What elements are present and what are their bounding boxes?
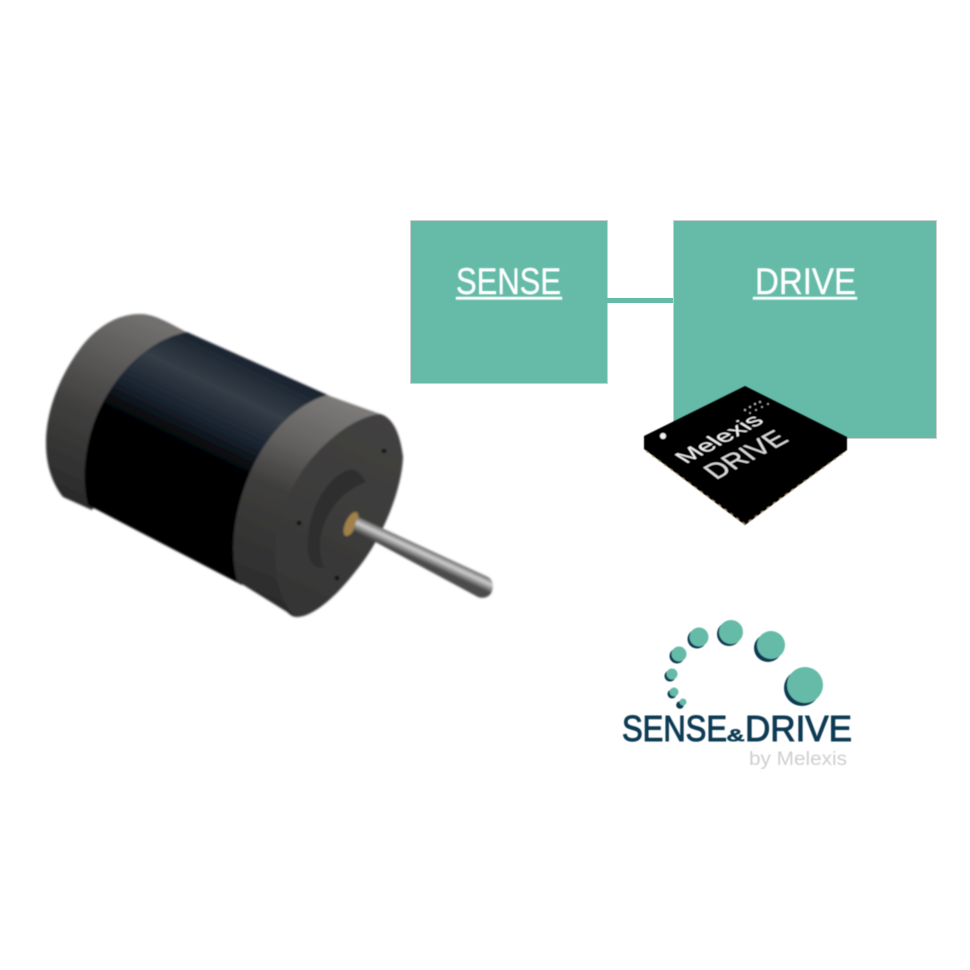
motor front band [233, 395, 403, 617]
heading: drive: DRIVE [755, 261, 856, 302]
logo dot arc [664, 620, 823, 709]
logo: sense & drive by melexis [622, 620, 852, 770]
logo wordmark: SENSE [622, 708, 727, 749]
panel: drive [674, 220, 936, 438]
chip label: drive: DRIVE [697, 426, 795, 484]
chip solder pads [646, 451, 845, 524]
mounting holes [297, 449, 386, 580]
logo byline: by Melexis [749, 749, 847, 770]
logo wordmark: DRIVE [745, 708, 852, 749]
motor boss crescent [308, 470, 366, 568]
brass bearing [341, 510, 361, 538]
chip label: melexis: Melexis [668, 411, 769, 467]
icon: melexis drive chip [644, 386, 847, 525]
motor illustration [46, 314, 493, 617]
connector between panels [607, 298, 674, 303]
logo wordmark [622, 708, 852, 749]
logo wordmark: & [727, 726, 745, 745]
chip pin-one dot [660, 433, 666, 439]
chip marking dots [744, 401, 769, 414]
heading: sense: SENSE [456, 261, 561, 302]
motor rear band [46, 314, 190, 510]
panel: sense [410, 220, 608, 384]
motor front face [275, 414, 403, 617]
motor shaft [353, 517, 493, 598]
motor black body [85, 332, 330, 585]
chip package [644, 386, 847, 525]
